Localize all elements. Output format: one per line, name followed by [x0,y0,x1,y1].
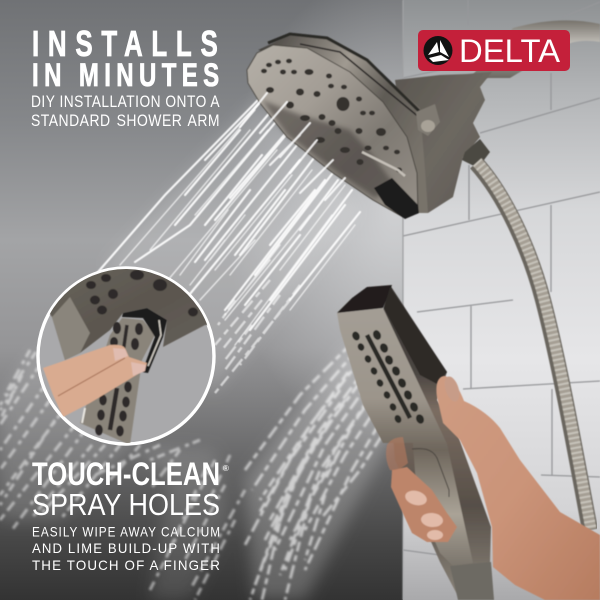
spray holes [261,59,402,173]
wand side [383,285,494,600]
heading: installs in minutes [32,24,226,93]
hand holding the wand [386,375,600,600]
close-up metal head [50,269,208,353]
logo mark [424,36,452,65]
wand top cap [337,285,392,313]
heading: installs in minutes: IN MINUTES [32,57,225,93]
heading: installs in minutes: INSTALLS [32,24,226,64]
palm, thumb and wrist [436,376,600,600]
registered mark: ® [223,464,229,473]
body: easily wipe away calcium [32,524,221,573]
heading: spray holes: SPRAY HOLES [32,487,220,522]
logo wordmark: DELTA [459,33,561,69]
water streaks over face [240,93,345,200]
water spray from main shower head [98,96,360,393]
spray haze [0,100,400,600]
side screw [416,104,440,136]
text: touch-clean spray holes [32,456,229,573]
body: easily wipe away calcium: EASILY WIPE AWAY CALCIUM [32,524,221,540]
water spray scatter, lower left [0,350,245,600]
wand front [337,308,473,566]
main shower head [247,34,492,219]
spray face [247,45,418,217]
face reflections [262,100,395,198]
hand shower wand [337,285,494,600]
close-up fingernails [113,348,128,361]
hose connector [462,139,490,168]
mount body [395,72,492,213]
subheading: diy installation: DIY INSTALLATION ONTO A [31,92,220,111]
wand side dark reflection [384,287,447,384]
subheading: diy installation [31,92,220,130]
back dome [258,35,428,213]
close-up holes [86,270,198,436]
subheading: diy installation: STANDARD SHOWER ARM [31,111,220,130]
inset circle: touch-clean close-up [38,265,215,445]
bright nozzle ridge [362,152,405,176]
nozzle holes [351,329,425,425]
body: easily wipe away calcium: AND LIME BUILD-UP WITH [32,540,221,556]
text: installs in minutes [31,24,226,130]
heading: touch-clean: TOUCH-CLEAN [32,456,220,492]
dark slot [374,178,419,219]
logo: delta [418,30,570,71]
close-up left arm [52,297,90,360]
background: tiled shower wall [403,0,600,600]
close-up fingers [43,345,147,417]
close-up nozzle [80,318,155,445]
wand lower stem [450,562,494,600]
thumbnail [442,375,462,403]
flexible hose [476,162,591,530]
shower arm [470,20,600,78]
wand button [412,449,449,497]
water spray from hand shower [245,345,395,600]
body: easily wipe away calcium: THE TOUCH OF A FINGER [32,557,221,573]
curled fingers [386,437,457,542]
